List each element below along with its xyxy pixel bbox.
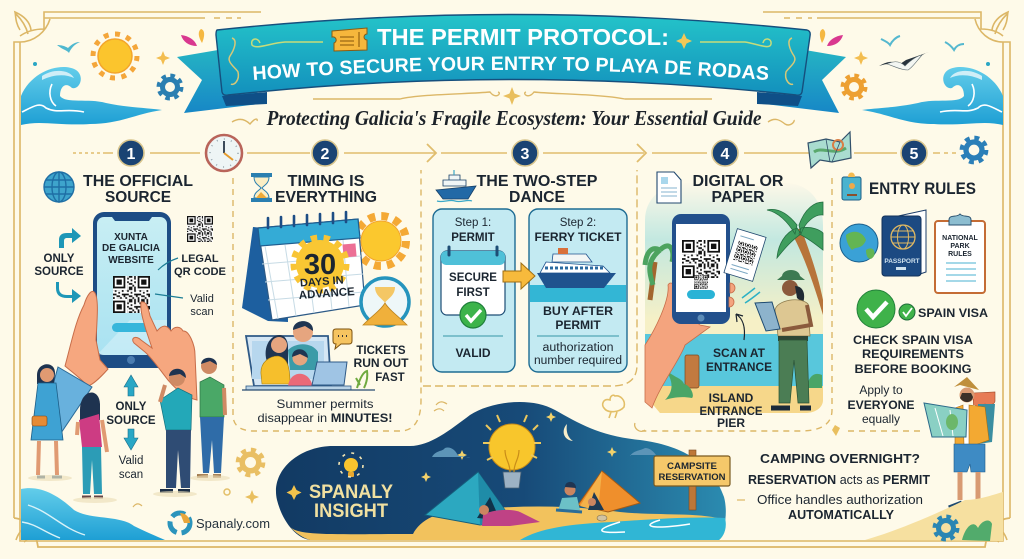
step 2 card: PERMIT: [555, 318, 601, 332]
spanaly insight heading: SPANALY: [309, 482, 393, 503]
pier label: [700, 391, 762, 430]
check requirements: [853, 333, 973, 376]
tickets run out label: [354, 345, 408, 384]
step 4 badge: [712, 140, 738, 166]
valid scan right label: scan: [190, 306, 214, 318]
dune under badge: [290, 506, 725, 540]
step 5 badge: 5: [910, 146, 919, 163]
heading: DIGITAL OR: [692, 173, 784, 190]
accent drops top right: [820, 29, 868, 65]
step 2 card: number required: [534, 355, 622, 367]
speech bubble: [333, 329, 352, 349]
step 4 badge: 4: [721, 146, 730, 163]
only source left label: [34, 253, 84, 278]
valid scan centre label: [119, 455, 143, 481]
step 2 card: FERRY TICKET: [534, 232, 622, 244]
check requirements: REQUIREMENTS: [862, 347, 964, 361]
heading: THE TWO-STEP: [476, 173, 598, 190]
clock hourglass: [361, 278, 409, 326]
legal QR label: [174, 253, 226, 278]
icon: hourglass: [251, 173, 272, 202]
waves at shore: [520, 517, 726, 540]
step 2 card: BUY AFTER: [543, 304, 613, 318]
valid scan right label: Valid: [190, 293, 214, 305]
title line 2: [253, 70, 766, 80]
family at laptop: [242, 321, 375, 390]
phone text: WEBSITE: [108, 255, 154, 266]
camping copy: RESERVATION acts as PERMIT: [748, 473, 930, 487]
step 1 card: VALID: [455, 346, 491, 360]
panel 3: the two-step dance: [433, 170, 627, 372]
campsite sign: CAMPSITE: [667, 461, 717, 471]
ornament under banner: [232, 87, 794, 125]
banner body: [216, 14, 810, 95]
sun top left: [93, 34, 137, 78]
bottom-left wave: [21, 488, 165, 540]
step 1 badge: 1: [127, 146, 136, 163]
sun behind calendar: [356, 216, 406, 266]
heading: [476, 173, 598, 206]
legal QR label: LEGAL: [181, 253, 219, 265]
arrow up to phone: [736, 314, 745, 340]
apply to everyone: equally: [862, 412, 900, 426]
ferry: [537, 248, 616, 288]
gear orange top right: [842, 76, 866, 98]
teal tent: [425, 472, 512, 525]
phone text: [102, 232, 160, 266]
tickets run out label: RUN OUT: [354, 358, 408, 370]
step 3 badge: 3: [521, 146, 530, 163]
step 2 card: authorization: [542, 342, 614, 354]
wifi signal: [742, 288, 760, 303]
phone with QR: [672, 214, 730, 324]
sparkle: [676, 33, 692, 49]
step 5 badge: [901, 140, 927, 166]
mother: [261, 335, 290, 384]
arrow between steps: [503, 263, 535, 289]
seagull: [879, 52, 929, 70]
step 2 badge: 2: [321, 146, 330, 163]
sparkle star: [286, 485, 302, 500]
panel 4: digital or paper: [645, 172, 823, 430]
campsite sign: [654, 450, 730, 510]
icon: document: [657, 172, 681, 203]
calendar: [242, 212, 365, 322]
scan label: ENTRANCE: [706, 360, 772, 374]
heading: ENTRY RULES: [869, 180, 976, 198]
step 2 badge: [312, 140, 338, 166]
paper ticket: [724, 229, 766, 281]
national park rules clipboard: [935, 214, 985, 293]
hand holding phone: [645, 283, 710, 408]
heading: [83, 173, 193, 206]
icon: clock: [206, 135, 242, 171]
small QR code: [187, 216, 213, 242]
step 1 badge: [118, 140, 144, 166]
clouds: [432, 447, 656, 457]
gold gear bottom: [238, 450, 263, 475]
wave top right: [862, 62, 1003, 125]
rock: [597, 515, 607, 521]
legal QR label: QR CODE: [174, 266, 226, 278]
icon: map: [808, 132, 851, 168]
30 days starburst: [295, 239, 355, 302]
phone text: DE GALICIA: [102, 243, 160, 254]
left ribbon tail: [177, 50, 267, 113]
only source centre label: ONLY: [116, 401, 147, 413]
bottom-right sand: [865, 492, 1003, 541]
traveler map: [924, 403, 967, 437]
summer note: disappear in MINUTES!: [258, 411, 392, 425]
permit ticket: FIRST: [456, 287, 490, 299]
banner scrolls: [229, 38, 795, 84]
panel 1: the official source: [28, 172, 230, 503]
globe: [840, 224, 878, 262]
check requirements: BEFORE BOOKING: [854, 362, 972, 376]
seated campers: [556, 482, 596, 512]
tickets run out label: TICKETS: [356, 345, 406, 357]
arrow up: [124, 375, 138, 396]
man in green: [190, 358, 230, 481]
spain visa: SPAIN VISA: [918, 306, 988, 320]
apply to everyone: EVERYONE: [848, 398, 914, 412]
pier label: ENTRANCE: [700, 404, 762, 418]
ticket icon: [332, 28, 367, 51]
passport: PASSPORT: [884, 258, 920, 265]
heading: EVERYTHING: [275, 189, 377, 206]
national park rules clipboard: RULES: [948, 251, 972, 258]
sleeping camper: [479, 505, 540, 526]
icon: blue gear: [962, 138, 986, 162]
icon: small bulb: [339, 453, 363, 477]
girl in pink: [73, 393, 117, 503]
sleeve: [43, 367, 92, 433]
icon: ship: [436, 170, 476, 202]
only source centre label: [106, 401, 156, 427]
ranger: [755, 270, 811, 408]
icon: globe: [44, 172, 74, 202]
scan label: [706, 346, 772, 374]
national park rules clipboard: NATIONAL: [942, 235, 979, 242]
heading: SOURCE: [105, 189, 171, 206]
pier label: PIER: [717, 416, 745, 430]
scan label: SCAN AT: [713, 346, 766, 360]
palm large: [767, 202, 823, 315]
step 2 card: Step 2:: [560, 217, 596, 229]
QR code: [113, 276, 150, 313]
step 1 card: [433, 209, 515, 372]
gear blue top left: [158, 76, 182, 98]
pier label: ISLAND: [709, 391, 754, 405]
spanaly insight heading: INSIGHT: [314, 501, 388, 522]
right hand: [133, 302, 197, 400]
arrow up-right: [59, 228, 81, 248]
child: [288, 349, 313, 388]
camping insight panel: [276, 402, 930, 540]
heading: [275, 173, 377, 206]
fingers: [729, 283, 735, 307]
big check: [857, 290, 895, 328]
falling tickets: [356, 371, 367, 388]
spanaly logo: [170, 513, 270, 533]
summer note: [258, 397, 392, 425]
right ribbon tail: [757, 50, 846, 113]
accent drops top left: [156, 29, 204, 65]
step 1 card: PERMIT: [451, 232, 495, 244]
step 2 card: [529, 209, 627, 372]
heading: DANCE: [509, 189, 565, 206]
birds top right: [881, 36, 964, 50]
heading: TIMING IS: [288, 173, 365, 190]
arrow lower: [56, 282, 81, 303]
camping copy: [748, 451, 930, 522]
phone: [93, 212, 171, 368]
wave top left: [21, 42, 162, 125]
orange tent: [578, 471, 640, 512]
30 days starburst: DAYS IN: [300, 274, 344, 290]
small ornaments: [133, 395, 840, 507]
only source centre label: SOURCE: [106, 415, 156, 427]
permit ticket: SECURE: [449, 272, 497, 284]
only source left label: SOURCE: [34, 266, 84, 278]
camping copy: AUTOMATICALLY: [788, 508, 895, 522]
apply to everyone: [848, 383, 914, 426]
laptop: [312, 362, 347, 385]
spanaly logo: Spanaly.com: [196, 516, 270, 531]
only source left label: ONLY: [44, 253, 75, 265]
title banner: HOW TO SECURE YOUR ENTRY TO PLAYA DE RODAS: [253, 56, 768, 80]
timeline line: [73, 144, 956, 162]
palm left: [645, 246, 673, 300]
pointer lines: [155, 258, 183, 298]
summer note: Summer permits: [276, 397, 374, 411]
small check: [899, 304, 915, 320]
arrow down: [124, 429, 138, 450]
panel 2: timing is everything: [242, 173, 409, 425]
spanaly insight heading: [309, 482, 393, 522]
tickets run out label: FAST: [375, 372, 405, 384]
panel dividers: [233, 170, 922, 431]
step 1 card: Step 1:: [455, 217, 491, 229]
30 days starburst: ADVANCE: [298, 286, 355, 302]
campsite sign: RESERVATION: [658, 472, 726, 482]
bulb rays: [483, 415, 541, 460]
father: [288, 321, 318, 370]
phone text: XUNTA: [114, 232, 148, 243]
post: [685, 355, 699, 388]
valid scan centre label: scan: [119, 469, 143, 481]
left hand: [65, 291, 108, 386]
moon and stars: [421, 412, 617, 482]
subtitle: Protecting Galicia's Fragile Ecosystem: Your Essential Guide: [266, 106, 762, 130]
title line 1: THE PERMIT PROTOCOL:: [377, 24, 669, 50]
apply to everyone: Apply to: [859, 383, 903, 397]
permit ticket: [441, 247, 505, 315]
heading: [692, 173, 784, 206]
large bulb: [489, 424, 535, 488]
valid scan centre label: Valid: [119, 455, 143, 467]
national park rules clipboard: PARK: [950, 243, 970, 250]
green check: [460, 302, 486, 328]
woman in blue dress: [28, 364, 72, 481]
panel 5: entry rules: [840, 172, 995, 508]
beach scene: [645, 183, 823, 413]
camping copy: Office handles authorization: [757, 493, 923, 507]
man in teal: [153, 369, 197, 497]
heading: PAPER: [712, 189, 765, 206]
heading: THE OFFICIAL: [83, 173, 193, 190]
valid scan right label: [190, 293, 214, 318]
traveler: [924, 377, 995, 508]
icon: clipboard: [842, 172, 861, 200]
30 days starburst: 30: [304, 249, 336, 281]
grass: [665, 370, 822, 400]
timeline: [73, 132, 986, 171]
passport: [882, 210, 926, 276]
check requirements: CHECK SPAIN VISA: [853, 333, 973, 347]
camping copy: CAMPING OVERNIGHT?: [760, 451, 920, 466]
night scene shape: [276, 402, 726, 540]
title banner: [177, 14, 846, 113]
step 3 badge: [512, 140, 538, 166]
